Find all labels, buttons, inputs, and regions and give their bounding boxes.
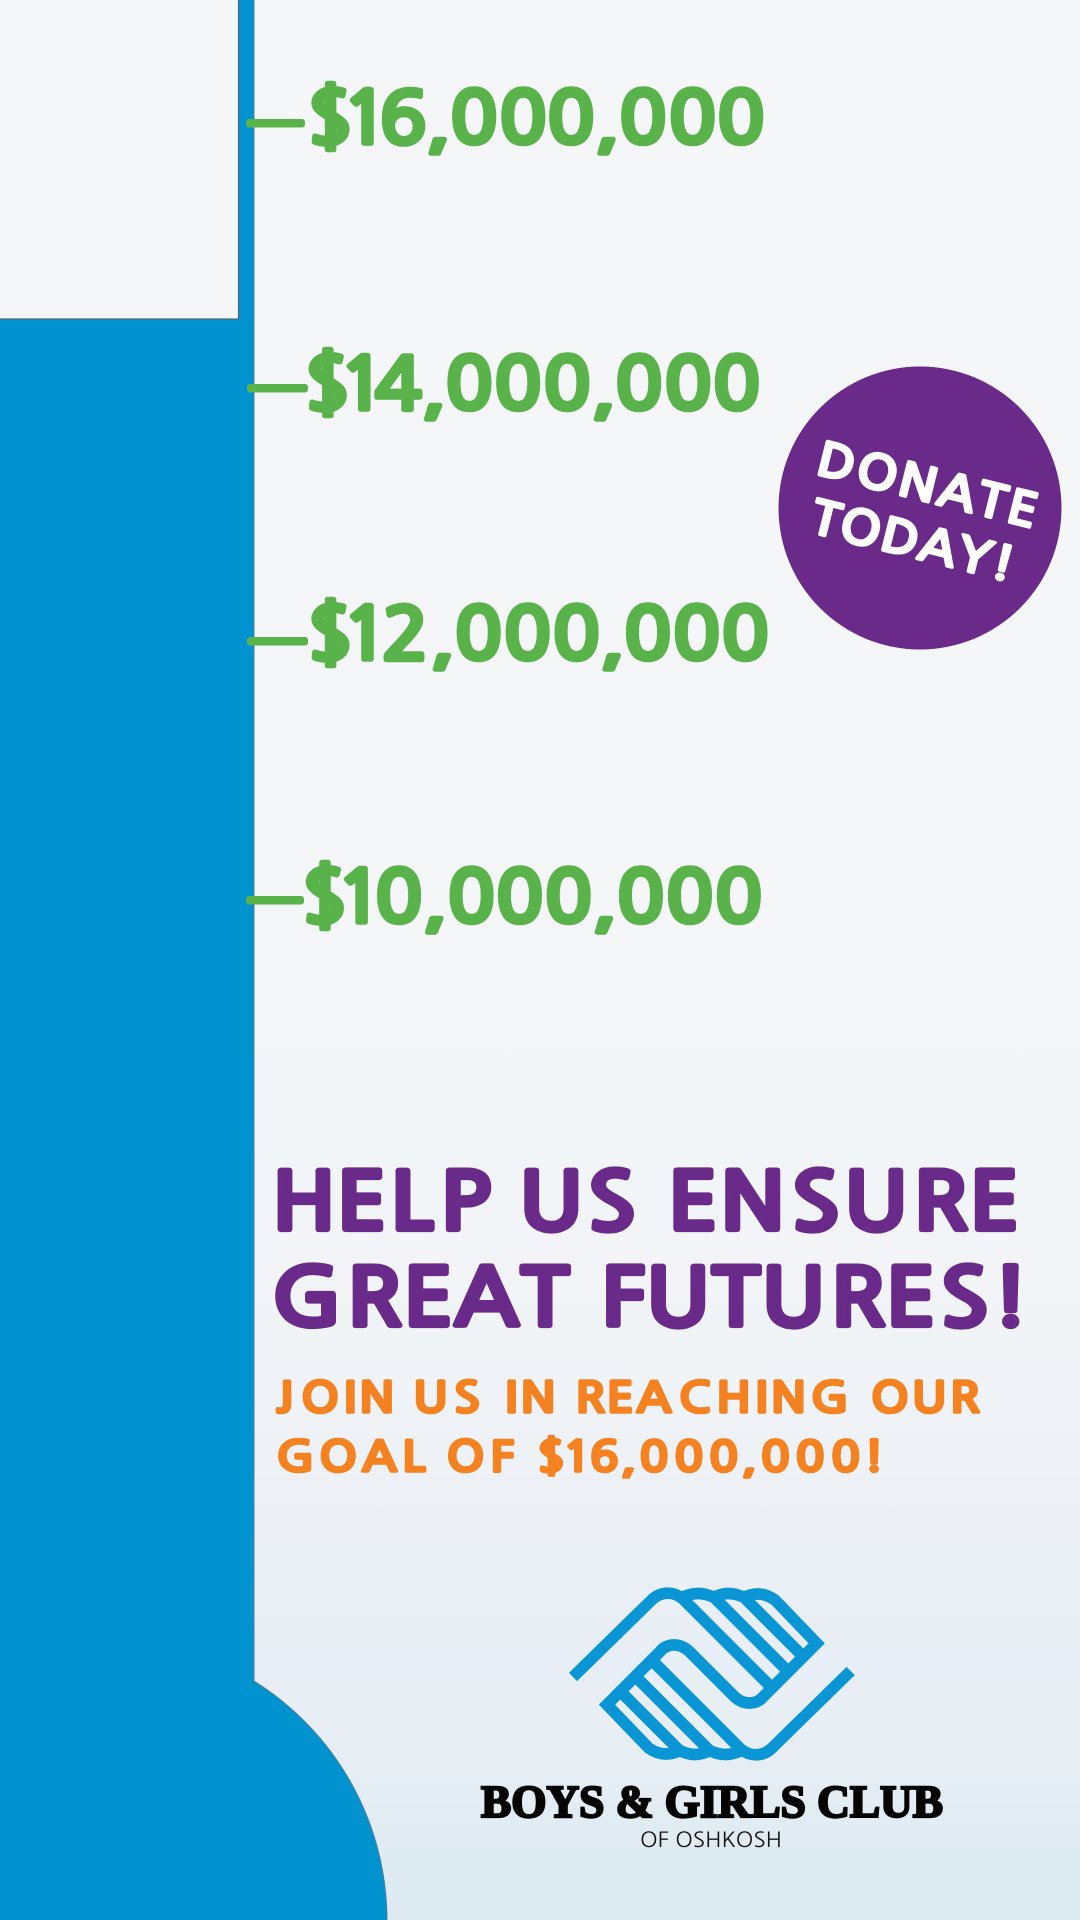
- donate today badge: [778, 366, 1062, 650]
- subheading: [276, 1377, 980, 1478]
- marker: $10,000,000: $10,000,000: [300, 860, 763, 934]
- logo location: OF OSHKOSH: [640, 1830, 782, 1851]
- thermometer unfilled area: [0, 0, 238, 319]
- marker: $14,000,000: $14,000,000: [303, 347, 761, 421]
- goal marker: $16,000,000: $16,000,000: [306, 81, 765, 155]
- thermometer: [0, 0, 387, 1920]
- headline: HELP US ENSURE: [271, 1163, 1020, 1242]
- donate today badge: TODAY!: [806, 495, 1019, 590]
- icon: clasped hands: [573, 1593, 851, 1755]
- headline: GREAT FUTURES!: [271, 1259, 1029, 1338]
- donate today badge: DONATE: [812, 437, 1043, 536]
- headline: [271, 1163, 1029, 1338]
- thermometer tube and bulb: [0, 0, 387, 1920]
- subheading: GOAL OF $16,000,000!: [276, 1435, 884, 1478]
- marker: $12,000,000: $12,000,000: [306, 597, 770, 671]
- logo name: BOYS & GIRLS CLUB: [481, 1776, 943, 1827]
- boys and girls club logo: [481, 1593, 943, 1851]
- subheading: JOIN US IN REACHING OUR: [276, 1377, 980, 1419]
